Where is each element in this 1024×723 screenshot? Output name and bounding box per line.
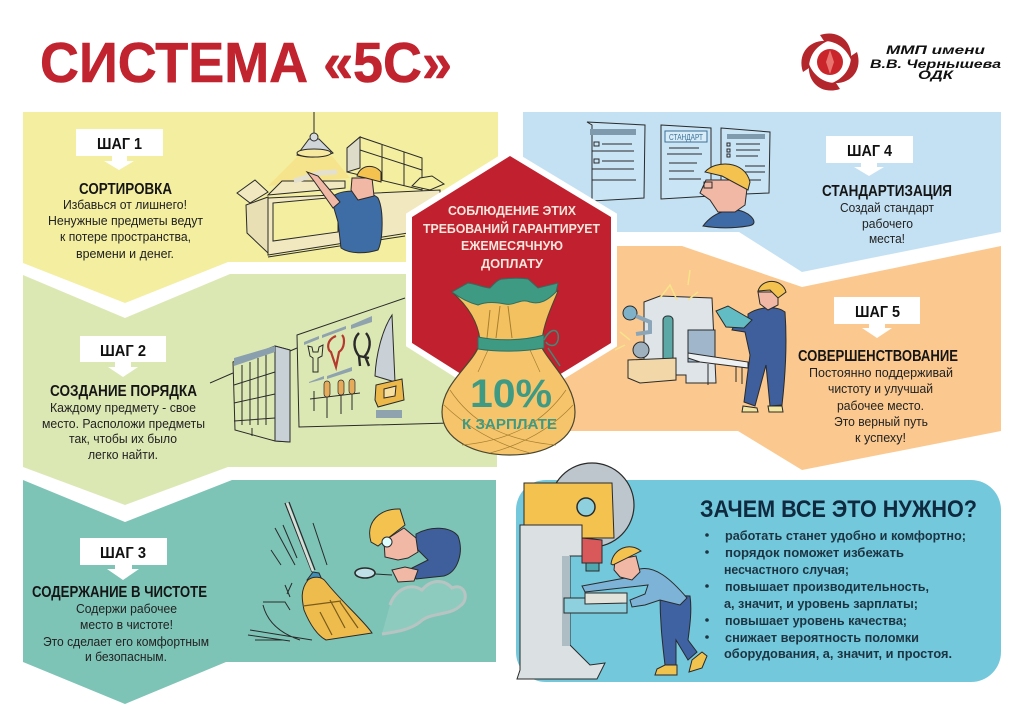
text: order description <box>42 401 205 462</box>
text: standardization description: рабочего <box>862 217 913 231</box>
text: bonus guarantee <box>423 203 600 271</box>
text: bonus guarantee: СОБЛЮДЕНИЕ ЭТИХ <box>448 203 576 218</box>
text: keeping clean description: и безопасным. <box>85 650 167 664</box>
document 1 <box>587 122 645 201</box>
illustration: tool board and shelves <box>210 298 450 442</box>
step label 3: ШАГ 3 <box>100 545 146 562</box>
text: why is it needed <box>700 496 977 661</box>
worker <box>582 547 707 675</box>
tool: screwdrivers <box>310 379 360 418</box>
heading: standardization: СТАНДАРТИЗАЦИЯ <box>822 183 952 200</box>
tool: saw <box>375 315 404 407</box>
text: keeping clean description <box>43 602 209 664</box>
bag body <box>442 348 575 455</box>
logo text: ОДК <box>918 70 954 82</box>
panel: step 3 background <box>23 480 496 704</box>
wrench in hand <box>294 172 337 181</box>
text: sorting description: времени и денег. <box>76 247 174 261</box>
tool: wrench <box>308 345 323 372</box>
crumpled paper <box>412 176 444 190</box>
clipboard <box>716 306 752 328</box>
text: order description: легко найти. <box>88 448 158 462</box>
motion lines <box>248 523 327 641</box>
step label 1 <box>76 129 163 170</box>
bullet list: повышает уровень качества; <box>725 613 907 628</box>
bag neck and ruffle <box>452 278 558 340</box>
icon: money bag <box>442 278 575 455</box>
text: improvement description <box>809 366 953 445</box>
illustration: worker with standard documents <box>587 122 770 228</box>
step 3 block <box>32 538 209 664</box>
worker <box>732 281 786 412</box>
bullet list: снижает вероятность поломки <box>725 630 919 645</box>
magnifier <box>355 568 392 578</box>
open cardboard box <box>237 180 440 257</box>
text: improvement description: к успеху! <box>855 431 906 445</box>
shelf boxes <box>347 137 422 190</box>
step label 1: ШАГ 1 <box>97 136 142 153</box>
text: order description: место. Расположи предметы <box>42 417 205 431</box>
text: bonus guarantee: ДОПЛАТУ <box>481 256 544 271</box>
tool: white pliers <box>354 333 370 366</box>
step label 2: ШАГ 2 <box>100 343 146 360</box>
text: sorting description: к потере пространства, <box>60 230 191 244</box>
illustration: press machine and worker <box>517 463 707 679</box>
bullet list <box>705 528 966 661</box>
logo text <box>870 45 1002 82</box>
document 2 <box>661 125 711 199</box>
text: keeping clean description: Это сделает его комфортным <box>43 635 209 649</box>
text: improvement description: Постоянно поддерживай <box>809 366 953 380</box>
worker inspecting <box>370 509 460 582</box>
text: bonus guarantee: ТРЕБОВАНИЙ ГАРАНТИРУЕТ <box>423 221 600 236</box>
illustration: worker sorting a box under a lamp <box>237 112 444 257</box>
icon: logo swirl <box>801 33 859 91</box>
dust cloud <box>382 582 465 634</box>
text: keeping clean description: Содержи рабочее <box>76 602 177 616</box>
worker <box>307 166 382 253</box>
bullet list: оборудования, а, значит, и простоя. <box>724 646 952 661</box>
bullet list: порядок поможет избежать <box>725 545 904 560</box>
bullet list: работать станет удобно и комфортно; <box>725 528 966 543</box>
step 1 block <box>48 129 203 261</box>
broom <box>285 502 372 640</box>
logo text: ММП имени <box>886 45 985 57</box>
text: order description: Каждому предмету - свое <box>50 401 196 415</box>
title: СИСТЕМА «5С» <box>40 31 452 95</box>
text: sorting description: Избавься от лишнего! <box>63 198 187 212</box>
text: standardization description: Создай стандарт <box>840 201 934 215</box>
lamp <box>297 112 333 157</box>
shelving unit <box>233 346 290 442</box>
panel: step 1 background <box>23 112 498 303</box>
text: bonus guarantee: ЕЖЕМЕСЯЧНУЮ <box>461 238 563 253</box>
panel: step 2 background <box>23 274 497 505</box>
panel: red hexagon bonus <box>412 156 611 405</box>
worker head <box>700 164 754 228</box>
bullet list: несчастного случая; <box>724 562 849 577</box>
document 3 <box>721 128 770 195</box>
text: improvement description: рабочее место. <box>837 399 924 413</box>
text: order description: так, чтобы их было <box>69 432 177 446</box>
text: sorting description <box>48 198 203 261</box>
workpiece <box>585 593 627 604</box>
bullet list: а, значит, и уровень зарплаты; <box>724 596 918 611</box>
step label 2 <box>80 336 166 377</box>
bag label: to salary: К ЗАРПЛАТЕ <box>462 416 557 433</box>
heading: why is it needed: ЗАЧЕМ ВСЕ ЭТО НУЖНО? <box>700 496 977 523</box>
logo text: В.В. Чернышева <box>870 59 1002 71</box>
lamp light <box>268 156 350 186</box>
step label 5: ШАГ 5 <box>855 304 900 321</box>
step label 5 <box>834 297 920 338</box>
illustration: machine and worker with clipboard <box>615 270 786 412</box>
bullet list: повышает производительность, <box>725 579 929 594</box>
heading: improvement: СОВЕРШЕНСТВОВАНИЕ <box>798 348 958 365</box>
heading: keeping clean: СОДЕРЖАНИЕ В ЧИСТОТЕ <box>32 584 207 601</box>
heading: sorting: СОРТИРОВКА <box>79 181 172 198</box>
text: keeping clean description: место в чистоте! <box>80 618 173 632</box>
step 5 block <box>798 297 958 445</box>
step label 4: ШАГ 4 <box>847 143 892 160</box>
text: improvement description: чистоту и улучшай <box>828 382 933 396</box>
step 4 block <box>822 136 952 246</box>
document 2: СТАНДАРТ <box>669 133 703 142</box>
heading: creating order: СОЗДАНИЕ ПОРЯДКА <box>50 383 197 400</box>
panel: step 4 background <box>523 112 1001 272</box>
step label 3 <box>80 538 167 580</box>
press machine <box>517 463 634 679</box>
step 2 block <box>42 336 205 462</box>
logo <box>801 33 1002 91</box>
illustration: worker with broom and magnifier <box>248 502 465 641</box>
machine <box>615 270 748 385</box>
panel: step 5 background <box>490 246 1001 470</box>
text: standardization description <box>840 201 934 246</box>
text: improvement description: Это верный путь <box>834 415 928 429</box>
bag label: percent: 10% <box>470 372 552 416</box>
net pattern <box>444 350 573 453</box>
tool board <box>297 298 450 427</box>
tool: red pliers <box>328 335 344 367</box>
bag tie <box>478 331 560 366</box>
text: standardization description: места! <box>869 232 905 246</box>
text: sorting description: Ненужные предметы ведут <box>48 214 203 228</box>
panel: why is it needed background <box>516 480 1001 682</box>
